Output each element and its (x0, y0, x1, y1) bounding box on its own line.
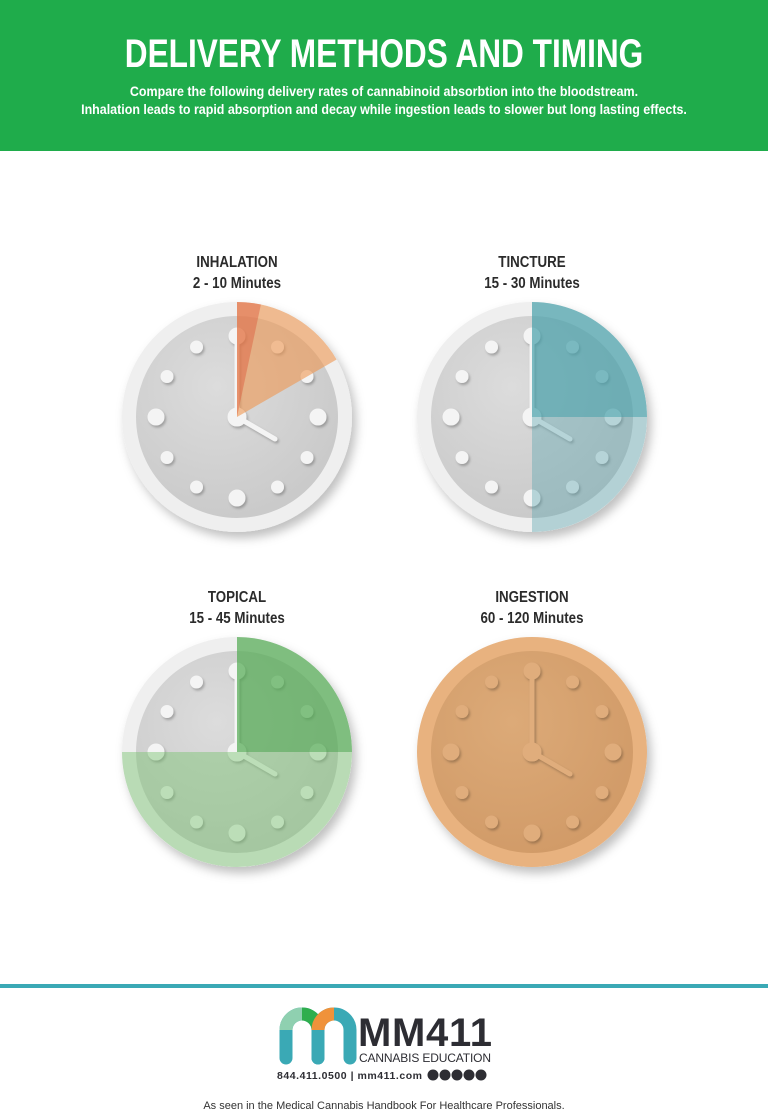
subtitle: Compare the following delivery rates of cannabinoid absorbtion into the bloodstream. (130, 83, 638, 99)
logo text: MM411 (358, 1011, 492, 1055)
label: topical: 15 - 45 Minutes (189, 610, 285, 627)
subtitle (81, 83, 687, 117)
label: tincture: 15 - 30 Minutes (484, 275, 580, 292)
label: ingestion (481, 589, 583, 627)
logo icon (286, 1014, 350, 1058)
label: ingestion: INGESTION (495, 589, 569, 606)
header banner (0, 0, 768, 151)
logo tagline: CANNABIS EDUCATION (359, 1051, 491, 1065)
subtitle: Inhalation leads to rapid absorption and decay while ingestion leads to slower but long lasting effects. (81, 101, 687, 117)
clock: topical (122, 637, 352, 867)
title: DELIVERY METHODS AND TIMING (125, 32, 643, 76)
footer note: As seen in the Medical Cannabis Handbook For Healthcare Professionals. (203, 1100, 565, 1112)
label: topical (189, 589, 285, 627)
label: ingestion: 60 - 120 Minutes (481, 610, 583, 627)
label: inhalation: 2 - 10 Minutes (193, 275, 281, 292)
label: inhalation (193, 254, 281, 292)
label: tincture (484, 254, 580, 292)
clock: inhalation (122, 302, 352, 532)
divider line (0, 984, 768, 988)
label: tincture: TINCTURE (498, 254, 566, 271)
social icons (428, 1070, 486, 1080)
contact line: 844.411.0500 | mm411.com (277, 1070, 422, 1082)
label: inhalation: INHALATION (196, 254, 278, 271)
clock: ingestion (417, 637, 647, 867)
label: topical: TOPICAL (208, 589, 266, 606)
clock: tincture (417, 302, 647, 532)
